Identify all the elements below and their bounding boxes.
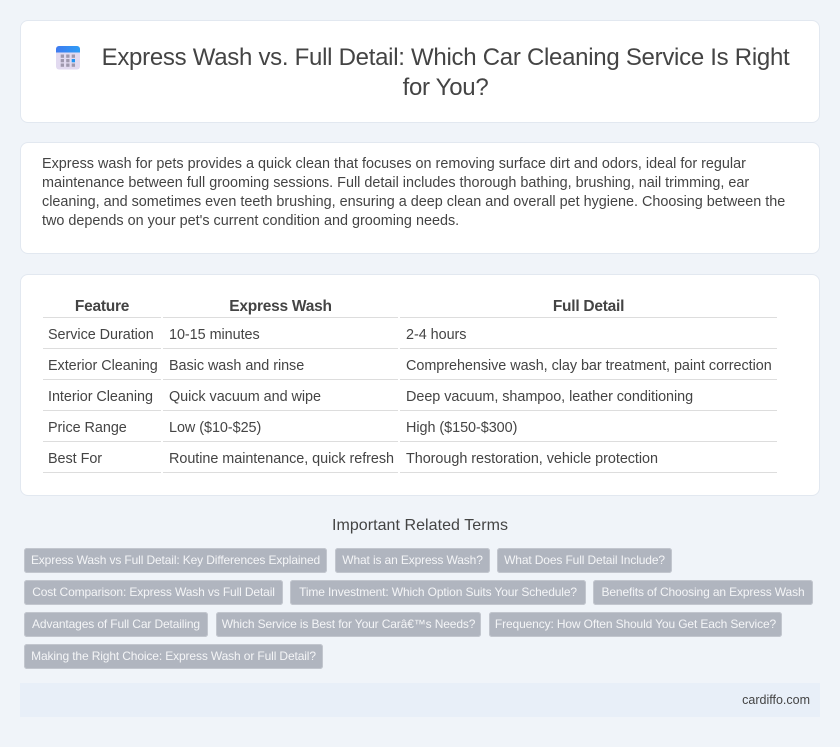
related terms tags: What is an Express Wash? (342, 553, 483, 567)
header panel (20, 20, 820, 123)
comparison table: Interior Cleaning (48, 389, 153, 405)
comparison table: Feature (75, 298, 129, 315)
intro paragraph: cleaning, and sometimes even teeth brushing, ensuring a deep clean and overall pet hygiene. Choosing between the (42, 194, 785, 210)
comparison table: Express Wash (229, 298, 332, 315)
related terms tags (24, 548, 813, 669)
related terms tags: Which Service is Best for Your Carâ€™s Needs? (222, 617, 475, 631)
footer (20, 683, 820, 717)
comparison table: Service Duration (48, 327, 154, 343)
intro paragraph: Express wash for pets provides a quick clean that focuses on removing surface dirt and odors, ideal for regular (42, 156, 746, 172)
comparison table: Deep vacuum, shampoo, leather conditioning (406, 389, 693, 405)
title: Express Wash vs. Full Detail: Which Car Cleaning Service Is Right (102, 44, 789, 71)
comparison table: 2-4 hours (406, 327, 466, 343)
comparison table: Comprehensive wash, clay bar treatment, paint correction (406, 358, 772, 374)
related terms tags: Making the Right Choice: Express Wash or Full Detail? (31, 649, 316, 663)
related terms tags: Benefits of Choosing an Express Wash (602, 585, 804, 599)
comparison table: Full Detail (553, 298, 624, 315)
intro paragraph: maintenance between full grooming sessions. Full detail includes thorough bathing, brushing, nail trimming, ear (42, 175, 749, 191)
footer brand: cardiffo.com (742, 693, 810, 707)
comparison table: Basic wash and rinse (169, 358, 304, 374)
comparison table: 10-15 minutes (169, 327, 260, 343)
icon: calendar (56, 46, 80, 70)
comparison table: Exterior Cleaning (48, 358, 158, 374)
related terms heading: Important Related Terms (332, 517, 508, 534)
related terms tags: What Does Full Detail Include? (504, 553, 665, 567)
intro paragraph (42, 156, 785, 229)
related terms tags: Express Wash vs Full Detail: Key Differences Explained (31, 553, 320, 567)
comparison table: Price Range (48, 420, 127, 436)
related terms tags: Frequency: How Often Should You Get Each Service? (495, 617, 776, 631)
related terms tags: Cost Comparison: Express Wash vs Full Detail (32, 585, 275, 599)
intro text panel (20, 142, 820, 254)
related terms tags: Advantages of Full Car Detailing (32, 617, 200, 631)
comparison table (43, 298, 777, 473)
comparison table: Routine maintenance, quick refresh (169, 451, 394, 467)
related terms tags: Time Investment: Which Option Suits Your Schedule? (299, 585, 577, 599)
comparison table: Low ($10-$25) (169, 420, 261, 436)
comparison table: Quick vacuum and wipe (169, 389, 321, 405)
title: for You? (403, 74, 488, 101)
comparison table: High ($150-$300) (406, 420, 517, 436)
comparison table panel (20, 274, 820, 496)
comparison table: Best For (48, 451, 102, 467)
intro paragraph: two depends on your pet's current condition and grooming needs. (42, 213, 459, 229)
comparison table: Thorough restoration, vehicle protection (406, 451, 658, 467)
title (102, 44, 790, 101)
